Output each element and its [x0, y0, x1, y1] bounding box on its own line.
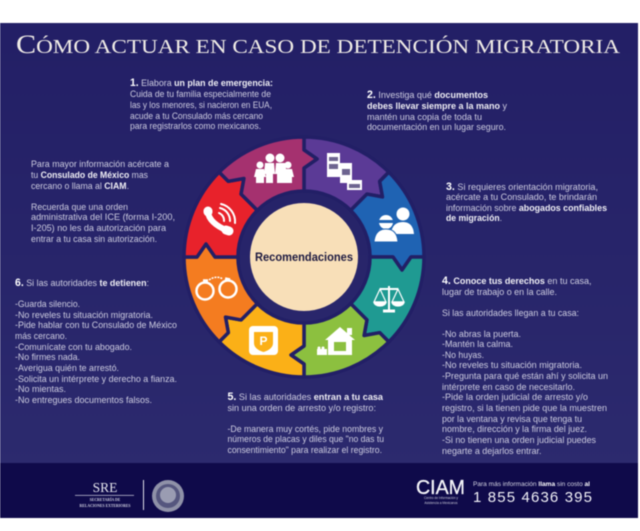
text block: step 1: Cuida de tu familia especialmente de [130, 88, 271, 99]
text block: step 4 [442, 275, 608, 456]
icon: police badge [249, 326, 278, 355]
text block: step 4: -Pregunta para qué están ahí y solicita un [442, 370, 608, 381]
text block: more information: Para mayor información acércate a [31, 158, 170, 169]
text block: step 4: lugar de trabajo o en la calle. [442, 286, 557, 297]
text block: step 4: -Si no tienen una orden judicial puedes [442, 434, 596, 445]
icon: documents [327, 153, 362, 190]
text block: step 6: -No entregues documentos falsos. [15, 394, 152, 405]
text block: step 2: mantén una copia de toda tu [367, 111, 482, 122]
text block: step 6: -No reveles tu situación migratoria. [15, 309, 153, 320]
logo: CIAM: Centro de Información y [424, 496, 458, 500]
logo: SRE: SRE [93, 480, 117, 495]
wheel of recommendations [159, 112, 449, 402]
text block: step 5 [228, 391, 384, 455]
text block: step 4: -No reveles tu situación migratoria. [442, 359, 582, 370]
text block: step 4: negarte a dejarlos entrar. [442, 445, 542, 456]
text block: step 6: más cercano. [15, 330, 67, 341]
text block: step 3: 3. Si requieres orientación migratoria, [446, 181, 598, 193]
text block: step 1: para registrarlos como mexicanos. [130, 120, 261, 131]
text block: step 2 [367, 89, 507, 132]
centre circle [250, 203, 358, 311]
wheel segments [159, 112, 449, 402]
text block: step 4: por la ventana y revisa que tenga tu [442, 413, 582, 424]
text block: step 6: -Solicita un intérprete y derecho a fianza. [15, 373, 177, 384]
contact phone: 1 855 4636 395 [473, 489, 592, 506]
text block: step 6: -No mientas. [15, 383, 66, 394]
text block: step 4: nombre, dirección y la firma del juez. [442, 423, 587, 434]
icon: family [254, 154, 294, 183]
logo: CIAM: CIAM [416, 477, 465, 499]
contact phone [473, 481, 592, 506]
text block: step 3: de migración. [446, 212, 502, 223]
icon: police badge: P [259, 334, 268, 348]
text block: step 4: -Mantén la calma. [442, 338, 513, 349]
text block: step 3 [446, 181, 607, 223]
logo: SRE [75, 480, 144, 510]
text block: step 6 [15, 277, 177, 405]
text block: step 4: -No abras la puerta. [442, 328, 521, 339]
icon: national seal [152, 480, 184, 512]
text block: step 4: intérprete en caso de necesitarlo. [442, 381, 575, 392]
icon: lawyers [374, 208, 414, 242]
text block: step 4: -No huyas. [442, 349, 484, 360]
text block: more information: cercano o llama al CIAM. [31, 180, 129, 191]
text block: more information: entrar a tu casa sin autorización. [31, 233, 157, 244]
text block: step 3: acércate a tu Consulado, te brindarán [446, 191, 597, 202]
text block: step 5: números de placas y diles que "no das tu [228, 433, 384, 444]
title: CÓMO ACTUAR EN CASO DE DETENCIÓN MIGRATORIA [16, 30, 621, 59]
text block: step 5: sin una orden de arresto y/o registro: [228, 402, 376, 413]
text block: step 6: -No firmes nada. [15, 351, 80, 362]
text block: step 6: -Pide hablar con tu Consulado de México [15, 319, 177, 330]
text block: step 1 [130, 77, 273, 131]
footer band [0, 463, 638, 518]
icon: house [317, 327, 355, 355]
logo: SRE: RELACIONES EXTERIORES [80, 504, 130, 508]
text block: more information [31, 158, 175, 244]
text block: step 6: -Averigua quién te arrestó. [15, 362, 119, 373]
text block: step 6: -Comunícate con tu abogado. [15, 341, 132, 352]
text block: step 4: registro, si la tienen pide que la muestren [442, 402, 607, 413]
icon: scales of justice [374, 286, 404, 311]
text block: step 1: acude a tu Consulado más cercano [130, 110, 263, 121]
text block: step 1: 1. Elabora un plan de emergencia: [130, 77, 273, 89]
text block: more information: I-205) no les da autorización para [31, 222, 167, 233]
text block: more information: Recuerda que una orden [31, 201, 128, 212]
text block: step 6: -Guarda silencio. [15, 298, 80, 309]
text block: step 3: información sobre abogados confiables [446, 202, 607, 213]
text block: step 4: Si las autoridades llegan a tu casa: [442, 307, 579, 318]
text block: step 2: 2. Investiga qué documentos [367, 89, 488, 101]
text block: step 6: 6. Si las autoridades te detienen: [15, 277, 149, 289]
text block: step 4: -Pide la orden judicial de arresto y/o [442, 391, 588, 402]
icon: handcuffs [196, 277, 236, 300]
text block: step 2: debes llevar siempre a la mano y [367, 100, 507, 111]
text block: more information: administrativa del ICE (forma I-200, [31, 211, 175, 222]
text block: more information: tu Consulado de México mas [31, 169, 148, 180]
text block: step 5: 5. Si las autoridades entran a tu casa [228, 391, 384, 403]
contact phone: Para más información llama sin costo al [473, 481, 590, 488]
text block: step 4: 4. Conoce tus derechos en tu casa, [442, 275, 592, 287]
text block: step 5: consentimiento" para realizar el registro. [228, 444, 382, 455]
text block: step 1: las y los menores, si nacieron en EUA, [130, 99, 272, 110]
icon: telephone [208, 204, 235, 231]
logo: SRE: SECRETARÍA DE [90, 497, 121, 502]
logo: CIAM: Asistencia a Mexicanos [424, 501, 458, 505]
text block: step 5: -De manera muy cortés, pide nombres y [228, 423, 383, 434]
centre label: Recomendaciones [255, 252, 353, 264]
text block: step 2: documentación en un lugar seguro. [367, 121, 506, 132]
